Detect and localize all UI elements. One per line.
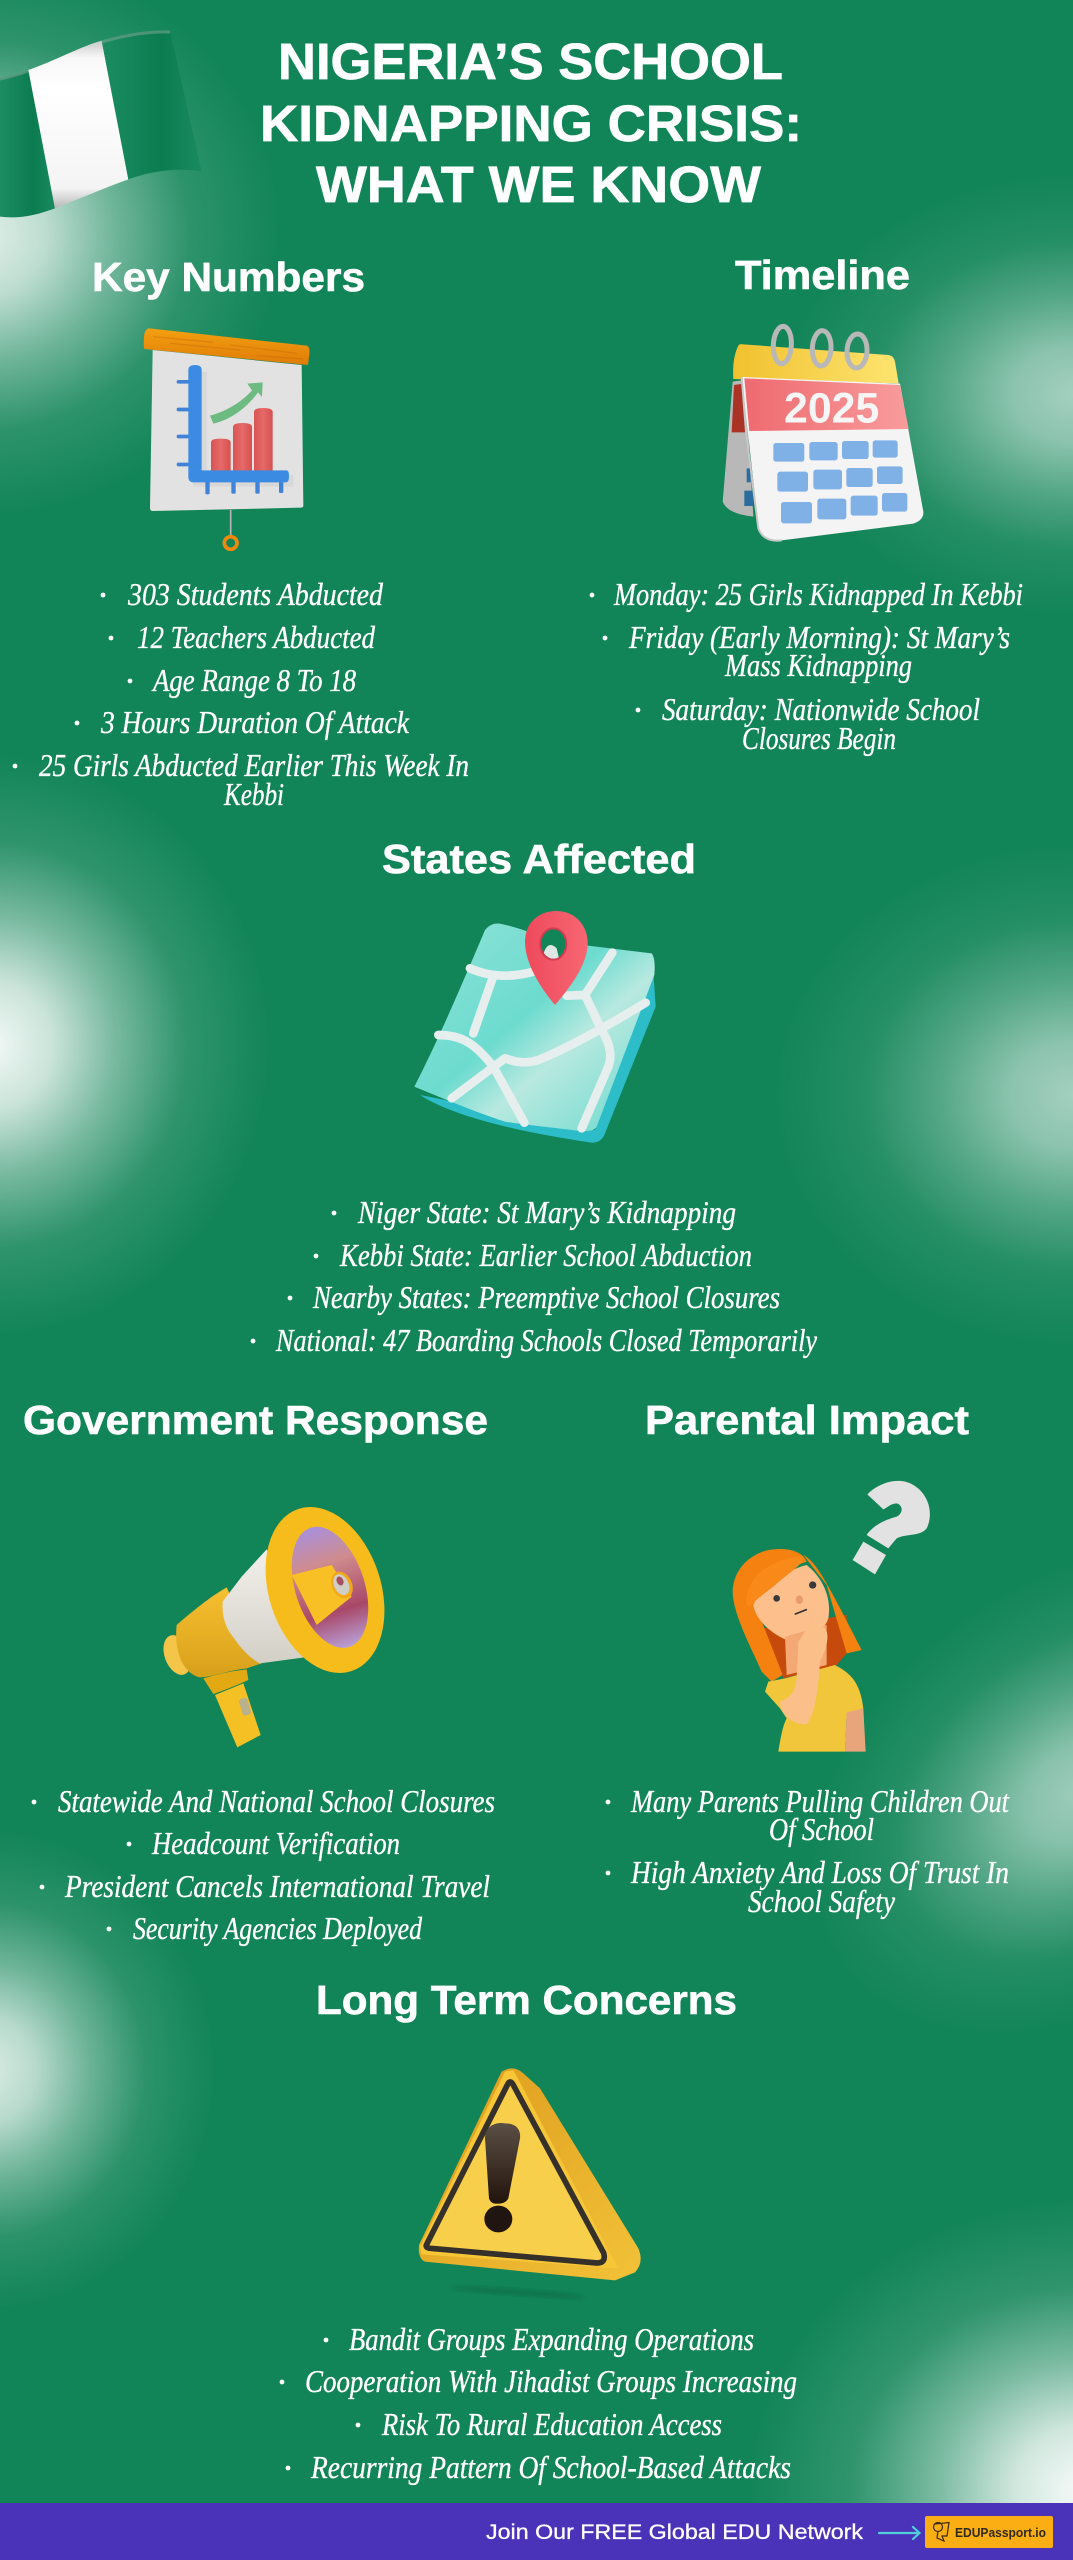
item: recurring pattern: Recurring Pattern Of School-Based Attacks [310,2449,791,2485]
title [260,33,802,213]
icon: folded map with pin [414,911,656,1143]
item: students: 303 Students Abducted [127,576,384,612]
item: saturday [636,691,980,756]
title: NIGERIA’S SCHOOL [278,33,783,90]
icon: presentation board with bar chart [144,328,309,549]
item: nearby: Nearby States: Preemptive School Closures [312,1279,780,1315]
logo badge: EDUPassport.io [955,2525,1046,2540]
heading: parental impact: Parental Impact [645,1397,969,1443]
title: KIDNAPPING CRISIS: [260,95,802,152]
heading: states affected: States Affected [382,836,696,882]
icon: thinking girl with question mark [733,1481,930,1752]
item: saturday: Closures Begin [742,720,896,756]
list: key numbers [13,576,469,812]
item: earlier abduction: Kebbi [223,776,284,812]
item: friday [603,619,1010,683]
item: niger: Niger State: St Mary’s Kidnapping [357,1194,736,1230]
title: WHAT WE KNOW [316,156,762,213]
panel: parental impact [606,1397,1010,1919]
item: anxiety [606,1854,1009,1919]
item: president: President Cancels International Travel [64,1868,490,1904]
item: duration: 3 Hours Duration Of Attack [100,704,410,740]
item: earlier abduction: 25 Girls Abducted Earlier This Week In [39,747,469,783]
item: parents pulling children: Of School [769,1811,874,1847]
panel: states affected [251,836,818,1358]
panel: timeline [590,252,1023,756]
footer banner [0,2503,1073,2560]
panel: key numbers [13,254,469,812]
item: rural education: Risk To Rural Education Access [381,2406,722,2442]
item: age range: Age Range 8 To 18 [151,662,356,698]
item: saturday: Saturday: Nationwide School [662,691,980,727]
item: closures: Statewide And National School Closures [58,1783,495,1819]
list: government response [32,1783,495,1946]
panel: government response [23,1397,495,1946]
item: security: Security Agencies Deployed [133,1910,423,1946]
list: long term concerns [280,2321,797,2485]
heading: key numbers: Key Numbers [92,254,365,300]
arrow [879,2527,920,2539]
item: friday: Mass Kidnapping [724,647,912,683]
icon: Nigerian flag [0,31,202,217]
list: parental impact [606,1783,1010,1919]
item: teachers: 12 Teachers Abducted [137,619,376,655]
list: timeline [590,576,1023,756]
item: kebbi: Kebbi State: Earlier School Abduction [339,1237,752,1273]
item: cooperation: Cooperation With Jihadist Groups Increasing [305,2363,797,2399]
icon: warning triangle [419,2068,641,2301]
item: national: National: 47 Boarding Schools Closed Temporarily [275,1322,818,1358]
list: states affected [251,1194,818,1358]
item: bandit groups: Bandit Groups Expanding Operations [349,2321,754,2357]
item: anxiety: High Anxiety And Loss Of Trust In [630,1854,1009,1890]
heading: long term concerns: Long Term Concerns [316,1977,737,2023]
panel: long term concerns [280,1977,797,2485]
footer text: Join Our FREE Global EDU Network [486,2520,863,2544]
item: anxiety: School Safety [748,1883,896,1919]
item: headcount: Headcount Verification [151,1825,400,1861]
item: parents pulling children [606,1783,1010,1847]
heading: government response: Government Response [23,1397,488,1443]
heading: timeline: Timeline [735,252,910,298]
icon: calendar 2025 [723,326,923,541]
item: friday: Friday (Early Morning): St Mary’s [628,619,1010,655]
icon: megaphone [158,1492,405,1747]
logo badge [925,2516,1053,2548]
icon: calendar 2025: 2025 [784,384,879,432]
item: earlier abduction [13,747,469,812]
